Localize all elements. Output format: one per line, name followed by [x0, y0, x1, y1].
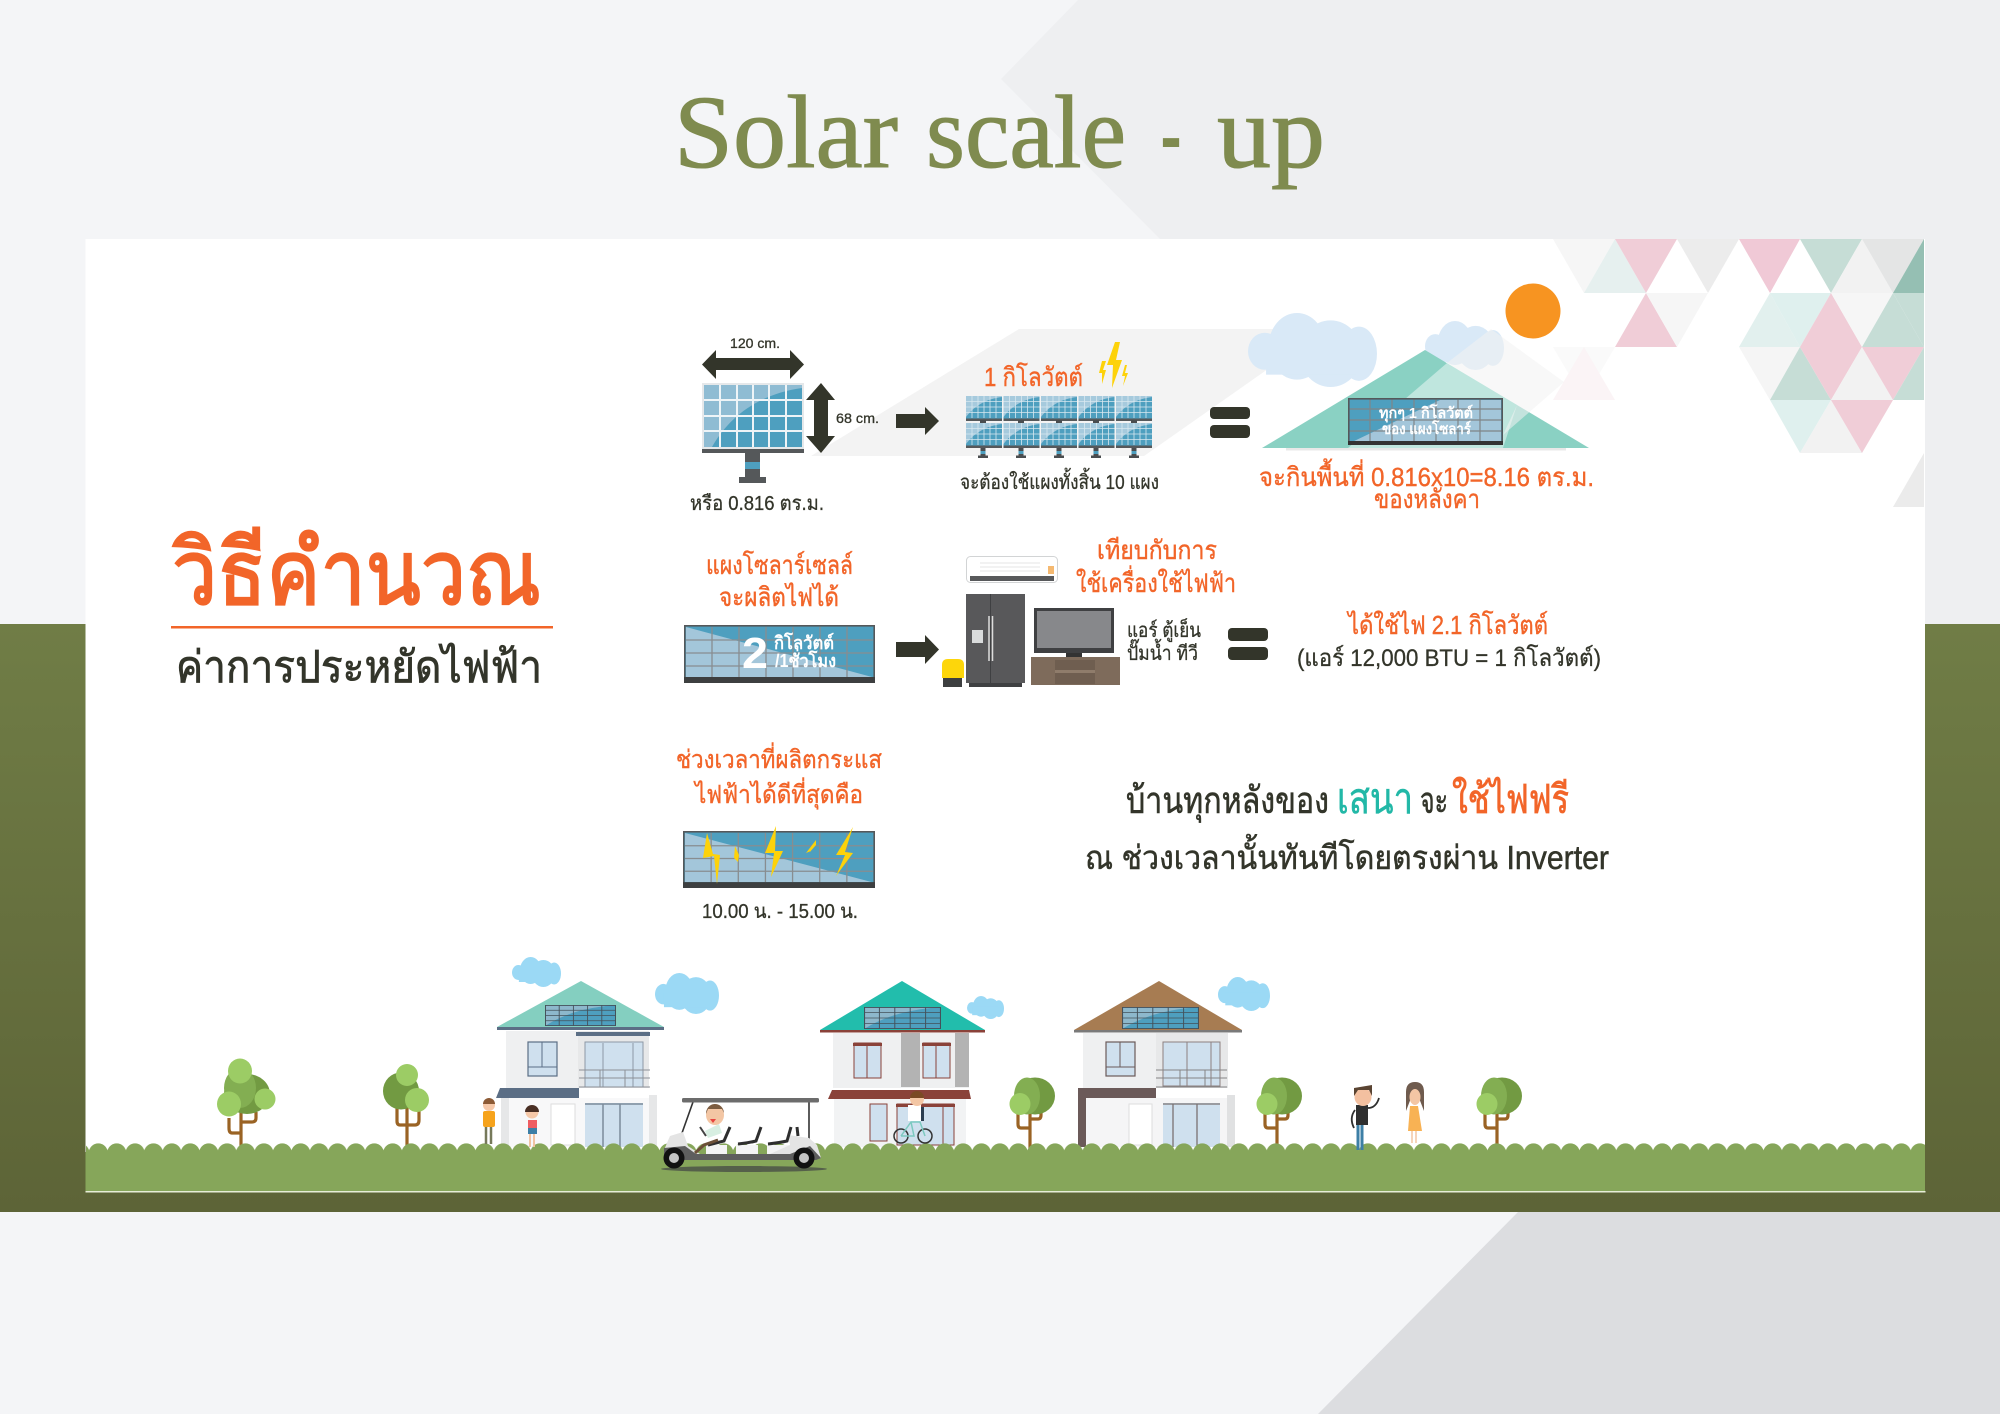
- label: BTU conversion: (แอร์ 12,000 BTU = 1 กิโลวัตต์): [1297, 644, 1601, 672]
- label: 1 kilowatt: 1 กิโลวัตต์: [984, 362, 1083, 392]
- heading: calculation method: วิธีคำนวณ: [172, 524, 541, 624]
- panel with lightning bolts: [683, 826, 875, 888]
- sun: [1506, 284, 1560, 338]
- label: best production time: ช่วงเวลาที่ผลิตกระแส: [676, 742, 882, 774]
- label: time window: 10.00 น. - 15.00 น.: [702, 901, 858, 923]
- statement line one: [1126, 775, 1569, 823]
- label: 120 cm: 120 cm.: [730, 335, 780, 351]
- person: woman: [1406, 1082, 1424, 1143]
- big cloud: [1248, 313, 1377, 387]
- statement line one: ใช้ไฟฟรี: [1452, 776, 1569, 822]
- label: pump tv: ปั๊มน้ำ ทีวี: [1127, 638, 1198, 665]
- label: of the roof: ของหลังคา: [1374, 484, 1480, 514]
- house roof: [1262, 329, 1589, 450]
- arrow: panel height: [806, 383, 835, 453]
- label: aircon fridge: แอร์ ตู้เย็น: [1127, 617, 1201, 643]
- title: -: [1161, 75, 1181, 190]
- rooftop solar panel with caption: ของ แผงโซลาร์: [1382, 419, 1472, 438]
- rooftop solar panel with caption: [1348, 398, 1503, 445]
- background shape: bottom right: [1318, 1212, 2000, 1414]
- person: cyclist: [894, 1091, 932, 1143]
- label: generates power: จะผลิตไฟได้: [719, 582, 839, 612]
- clouds in the street scene: [512, 957, 1270, 1019]
- tree two: [383, 1064, 429, 1146]
- heading underline: [171, 626, 553, 628]
- title: [674, 75, 1325, 190]
- panel: 2 kW per hour: /1ชั่วโมง: [775, 648, 836, 671]
- tree three: [1010, 1078, 1055, 1150]
- person: man waving: [1352, 1085, 1379, 1150]
- equals sign: row two: [1228, 628, 1268, 660]
- subheading: electricity saving: ค่าการประหยัดไฟฟ้า: [176, 642, 542, 692]
- icon: array of ten solar panels: [965, 396, 1153, 458]
- label: solar cells produce: แผงโซลาร์เซลล์: [706, 550, 853, 580]
- house one: [496, 981, 664, 1147]
- main white panel: [86, 239, 1925, 1192]
- rooftop solar panel with caption: ทุกๆ 1 กิโลวัตต์: [1379, 403, 1473, 423]
- label: compared with appliances: เทียบกับการ: [1097, 535, 1217, 565]
- grass ground: [86, 1152, 1925, 1192]
- label: best production time line 2: ไฟฟ้าได้ดีที่สุดคือ: [693, 777, 863, 810]
- icon: single solar panel: [702, 383, 804, 483]
- icon: television on cabinet: [1031, 608, 1120, 685]
- statement line one: จะ: [1420, 780, 1448, 821]
- person: girl: [525, 1105, 539, 1147]
- ground edge line: [86, 1191, 1926, 1192]
- arrow: to ten panels: [896, 407, 939, 435]
- arrow: to appliances: [896, 635, 939, 664]
- background shape: top right: [1001, 0, 2000, 640]
- green band: [0, 624, 2000, 1212]
- panel: 2 kW per hour: 2: [742, 629, 768, 678]
- title: up: [1217, 75, 1325, 190]
- arrow: panel width: [702, 350, 804, 379]
- house three: [1074, 981, 1242, 1147]
- tree one: [217, 1058, 276, 1150]
- icon: water pump: [942, 659, 964, 687]
- grass scallops: [86, 1143, 1925, 1157]
- panel: 2 kW per hour: [684, 625, 875, 683]
- icon: air conditioner: [966, 556, 1058, 582]
- triangle pattern: [1553, 239, 1924, 507]
- icon: lightning bolts: [1099, 342, 1128, 388]
- statement line one: บ้านทุกหลังของ: [1126, 780, 1329, 823]
- label: ten panels: จะต้องใช้แผงทั้งสิ้น 10 แผง: [960, 468, 1159, 494]
- title: scale: [926, 75, 1126, 190]
- label: area per panel: หรือ 0.816 ตร.ม.: [690, 493, 824, 515]
- person: boy: [483, 1098, 495, 1144]
- house two: [820, 981, 985, 1147]
- panel: 2 kW per hour: กิโลวัตต์: [774, 632, 834, 653]
- label: roof area used: จะกินพื้นที่ 0.816x10=8.16 ตร.ม.: [1259, 458, 1594, 492]
- small cloud: [1425, 321, 1504, 370]
- label: using appliances: ใช้เครื่องใช้ไฟฟ้า: [1076, 565, 1236, 598]
- statement line two: ณ ช่วงเวลานั้นทันทีโดยตรงผ่าน Inverter: [1085, 834, 1609, 876]
- icon: refrigerator: [966, 594, 1025, 687]
- tree four: [1256, 1078, 1302, 1150]
- gray sloped background shape: [811, 329, 1325, 456]
- tree five: [1476, 1078, 1522, 1150]
- label: 2.1 kW used: ได้ใช้ไฟ 2.1 กิโลวัตต์: [1346, 610, 1548, 640]
- golf cart with driver: [661, 1098, 827, 1172]
- label: 68 cm: 68 cm.: [836, 410, 879, 426]
- equals sign: row one: [1210, 407, 1250, 438]
- title: Solar: [674, 75, 898, 190]
- statement line one: เสนา: [1337, 775, 1413, 822]
